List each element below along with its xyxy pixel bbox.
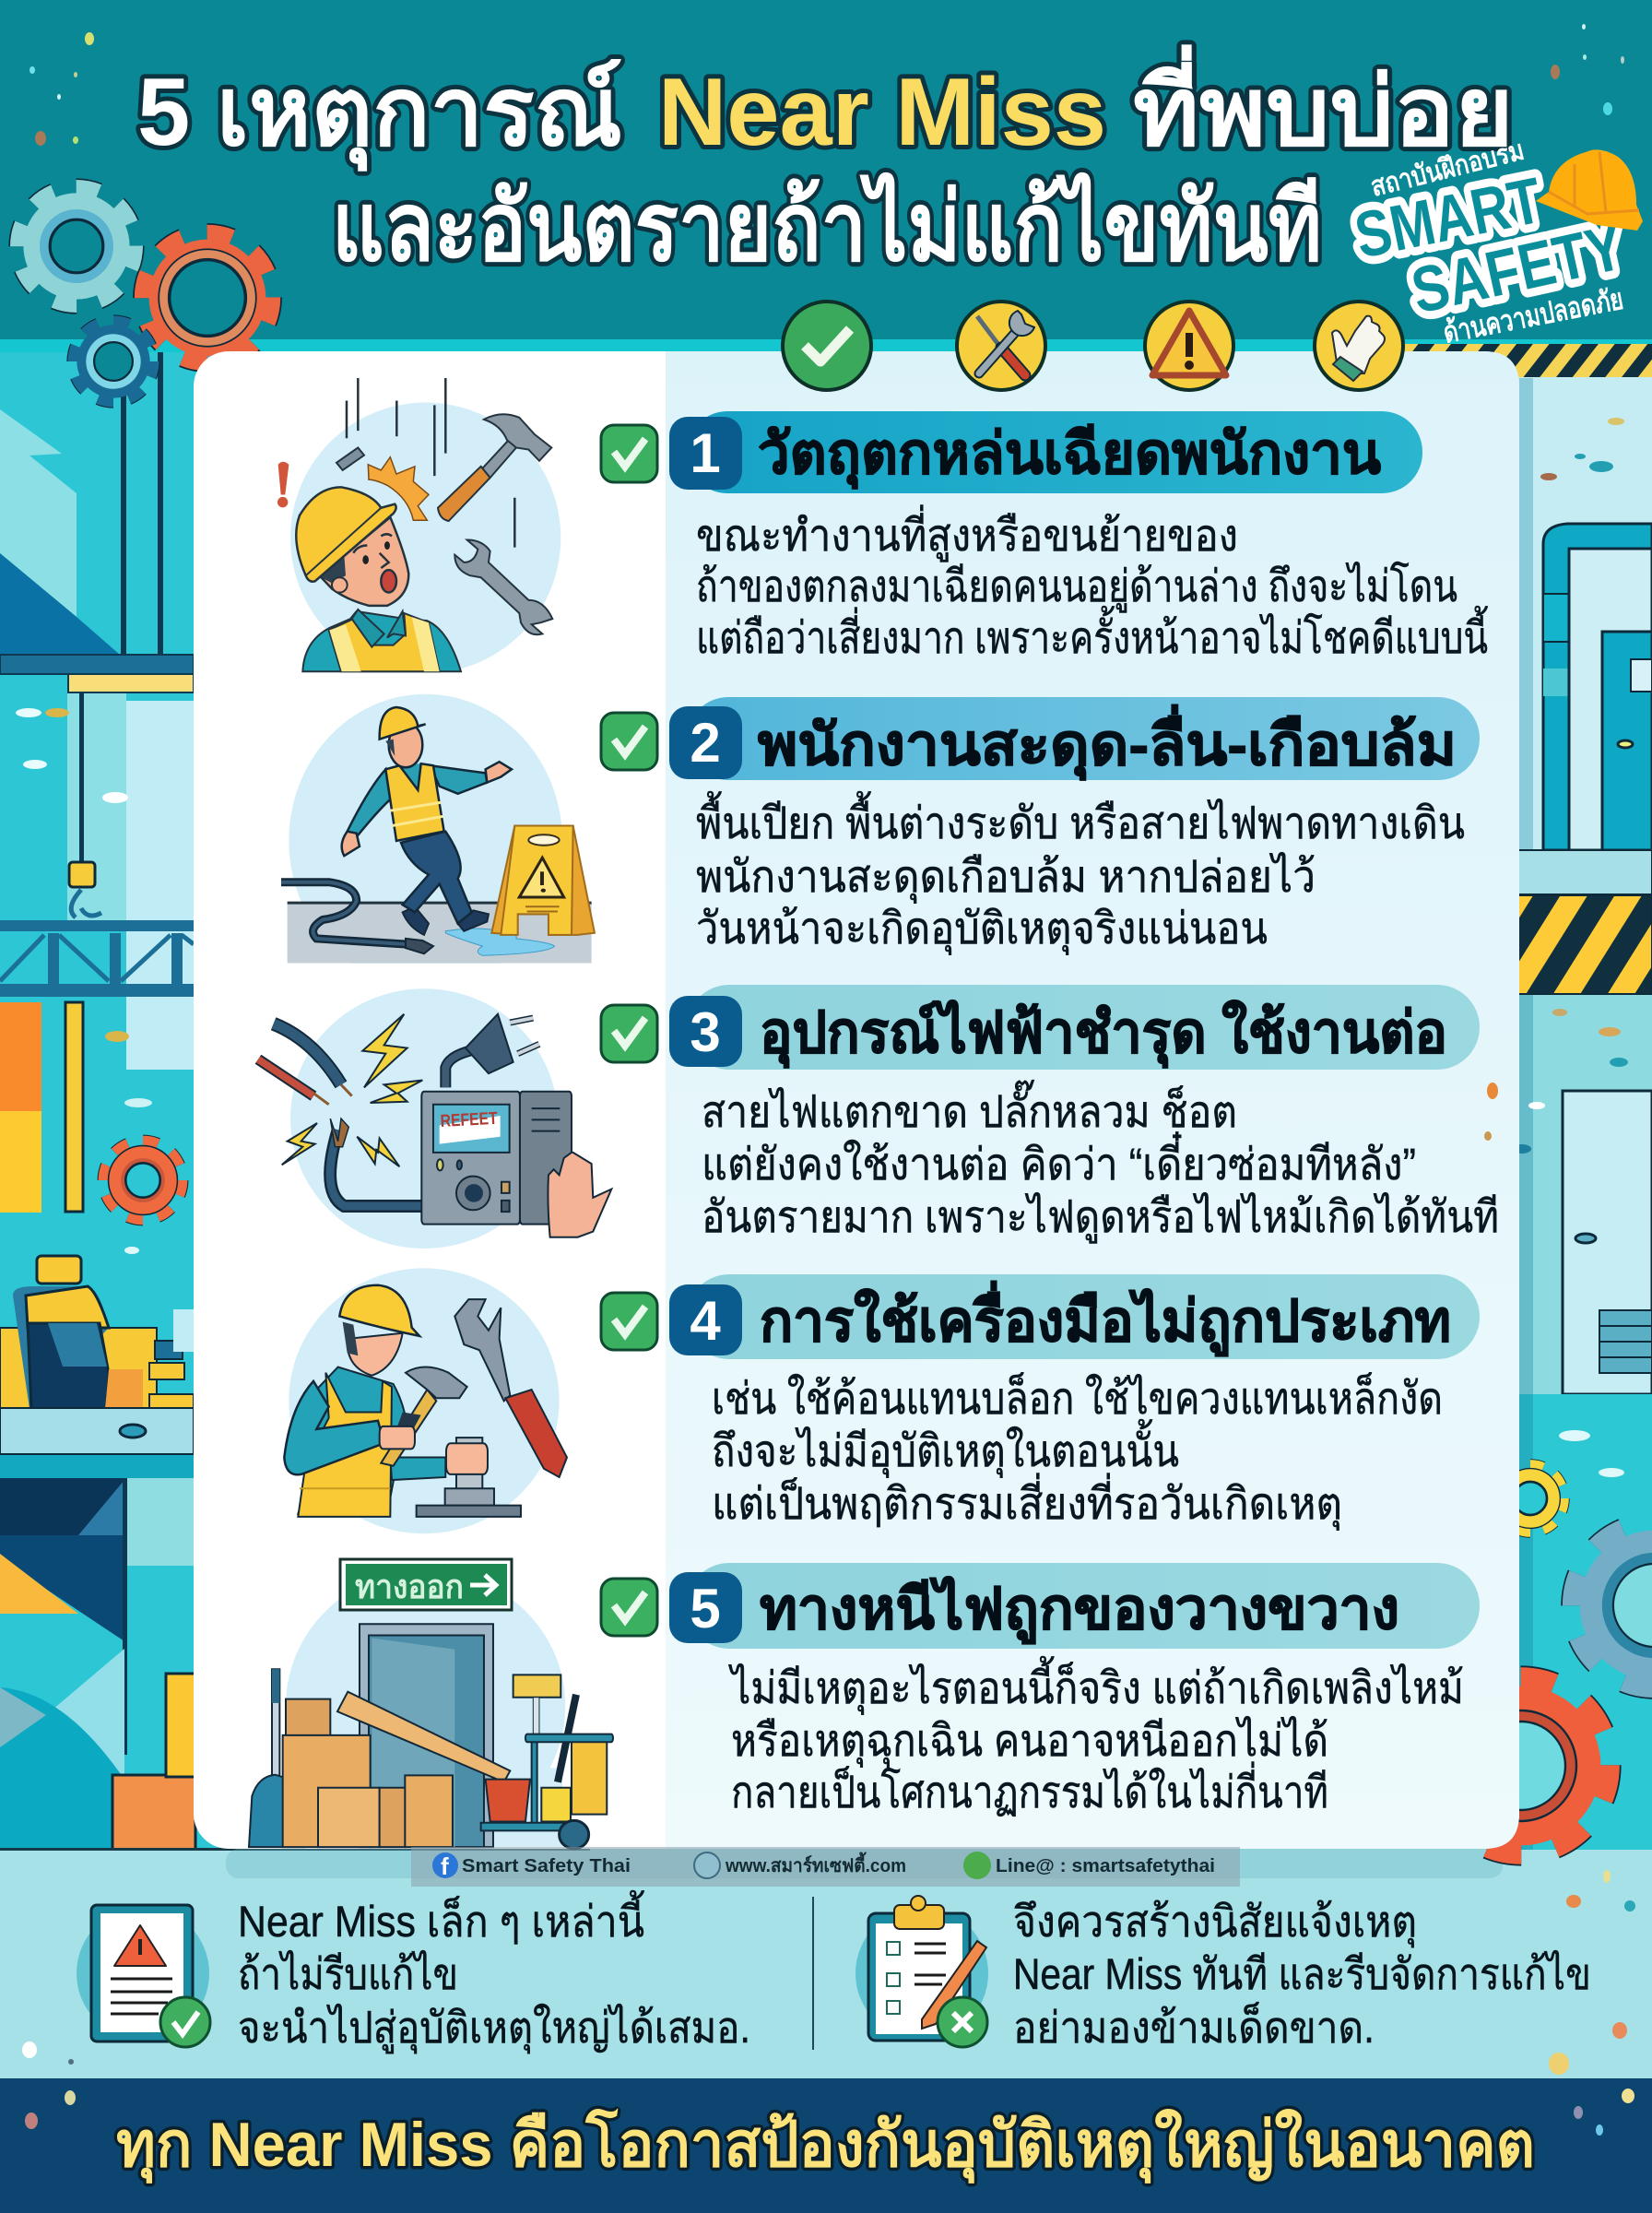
exit sign: ทางออก [355, 1568, 464, 1605]
row 5 [249, 1559, 1480, 1849]
gear: orange left [144, 234, 271, 361]
illustration: slip trip [281, 694, 595, 998]
logo: Smart Safety [1349, 136, 1643, 349]
heading pill 3 [669, 985, 1480, 1070]
social contact strip: Smart Safety Thai [462, 1856, 631, 1876]
footer text left [238, 1890, 750, 2054]
logo helmet [1536, 149, 1643, 231]
illustration: wrong tool use [284, 1268, 567, 1533]
icon: checklist clipboard [856, 1896, 988, 2047]
body text 4 [712, 1372, 1443, 1531]
exit sign [340, 1559, 512, 1610]
banner message: ทุก Near Miss คือโอกาสป้องกันอุบัติเหตุใหญ่ในอนาคต [116, 2108, 1535, 2183]
body text 2: พนักงานสะดุดเกือบล้ม หากปล่อยไว้ [696, 851, 1316, 904]
body text 4: เช่น ใช้ค้อนแทนบล็อก ใช้ไขควงแทนเหล็กงัด [712, 1372, 1443, 1424]
social contact strip: Line@ : smartsafetythai [996, 1856, 1215, 1876]
row 1 [277, 378, 1488, 676]
heading pill 5: 5 [690, 1578, 721, 1639]
body text 5 [727, 1656, 1464, 1817]
heading pill 2: พนักงานสะดุด-ลื่น-เกือบล้ม [758, 704, 1457, 780]
check 2 [601, 713, 657, 770]
body text 2: วันหน้าจะเกิดอุบัติเหตุจริงแน่นอน [696, 905, 1268, 955]
gear: yellow right [1497, 1465, 1564, 1532]
body text 1 [696, 504, 1488, 663]
title: Near Miss [658, 59, 1106, 166]
footer conclusion band [0, 1848, 1652, 2079]
check 3 [601, 1005, 657, 1062]
social contact strip [411, 1847, 1240, 1887]
check 5 [601, 1579, 657, 1636]
logo: Smart Safety: SMART [1349, 164, 1548, 272]
heading pill 3: อุปกรณ์ไฟฟ้าชำรุด ใช้งานต่อ [760, 1000, 1447, 1068]
logo: Smart Safety: สถาบันฝึกอบรม [1368, 136, 1528, 203]
body text 3: อันตรายมาก เพราะไฟดูดหรือไฟไหม้เกิดได้ทันที [702, 1191, 1499, 1244]
REFEET sign: REFEET [440, 1109, 499, 1131]
body text 3: สายไฟแตกขาด ปลั๊กหลวม ช็อต [702, 1080, 1237, 1137]
check 4 [601, 1293, 657, 1350]
gear: pale left [19, 189, 134, 303]
heading pill 4: การใช้เครื่องมือไม่ถูกประเภท [760, 1281, 1451, 1356]
gear: small orange left [104, 1142, 182, 1219]
social contact strip: f [441, 1852, 449, 1880]
heading pill 1 [669, 411, 1422, 493]
check 1 [601, 425, 657, 482]
heading pill 1: วัตถุตกหล่นเฉียดพนักงาน [758, 422, 1381, 489]
body text 5: หรือเหตุฉุกเฉิน คนอาจหนีออกไม่ได้ [731, 1715, 1328, 1768]
icon: warning badge [1145, 302, 1233, 390]
gear: navy left [74, 322, 153, 401]
title [137, 44, 1514, 281]
illustration: damaged electrical device [258, 988, 611, 1249]
title: ที่พบบ่อย [1133, 44, 1514, 166]
background right column [1503, 369, 1652, 1850]
gear: grey-blue right [1574, 1524, 1652, 1686]
title: และอันตรายถ้าไม่แก้ไขทันที [332, 172, 1322, 281]
body text 4: ถึงจะไม่มีอุบัติเหตุในตอนนั้น [712, 1419, 1179, 1478]
hazard stripe top [1403, 344, 1652, 377]
background left column [0, 349, 212, 1861]
row 2 [281, 694, 1480, 998]
heading pill 4 [669, 1274, 1480, 1359]
body text 3: แต่ยังคงใช้งานต่อ คิดว่า “เดี๋ยวซ่อมทีหลัง” [702, 1131, 1416, 1189]
header band [0, 0, 1652, 352]
body text 5: กลายเป็นโศกนาฏกรรมได้ในไม่กี่นาที [731, 1761, 1328, 1817]
body text 2 [696, 791, 1465, 955]
gear: red right [1434, 1679, 1608, 1852]
bottom banner [0, 2078, 1652, 2213]
illustration: blocked fire exit [249, 1570, 613, 1849]
row 4 [284, 1268, 1480, 1533]
icon: warning document [77, 1905, 210, 2047]
body text 3 [702, 1080, 1499, 1244]
body text 1: ถ้าของตกลงมาเฉียดคนนอยู่ด้านล่าง ถึงจะไม่โดน [696, 561, 1457, 613]
footer text right: อย่ามองข้ามเด็ดขาด. [1013, 2001, 1375, 2052]
heading pill 2: 2 [690, 712, 721, 774]
title: 5 เหตุการณ์ [137, 58, 622, 172]
footer text left: Near Miss เล็ก ๆ เหล่านี้ [238, 1890, 644, 1946]
heading pill 3: 3 [690, 1001, 721, 1063]
body text 1: แต่ถือว่าเสี่ยงมาก เพราะครั้งหน้าอาจไม่โชคดีแบบนี้ [696, 606, 1488, 663]
body text 1: ขณะทำงานที่สูงหรือขนย้ายของ [696, 504, 1238, 562]
heading pill 4: 4 [690, 1290, 721, 1352]
row 3 [258, 985, 1499, 1249]
footer text left: ถ้าไม่รีบแก้ไข [238, 1949, 458, 1998]
heading pill 2 [669, 697, 1480, 780]
heading pill 1: 1 [690, 422, 721, 484]
heading pill 5: ทางหนีไฟถูกของวางขวาง [760, 1576, 1399, 1644]
icon: green check badge [783, 302, 871, 390]
icon: glove badge [1315, 302, 1403, 390]
heading pill 5 [669, 1563, 1480, 1649]
body text 5: ไม่มีเหตุอะไรตอนนี้ก็จริง แต่ถ้าเกิดเพลิงไหม้ [727, 1656, 1464, 1715]
footer text right: จึงควรสร้างนิสัยแจ้งเหตุ [1013, 1897, 1417, 1948]
footer text left: จะนำไปสู่อุบัติเหตุใหญ่ได้เสมอ. [238, 2003, 750, 2054]
footer text right [1013, 1897, 1591, 2052]
icon: tools badge [957, 302, 1045, 390]
illustration: falling objects [277, 378, 565, 676]
body text 2: พื้นเปียก พื้นต่างระดับ หรือสายไฟพาดทางเดิน [696, 791, 1465, 848]
main panel [194, 351, 1519, 1849]
body text 4: แต่เป็นพฤติกรรมเสี่ยงที่รอวันเกิดเหตุ [712, 1473, 1342, 1531]
social contact strip: www.สมาร์ทเซฟตี้.com [725, 1852, 906, 1876]
